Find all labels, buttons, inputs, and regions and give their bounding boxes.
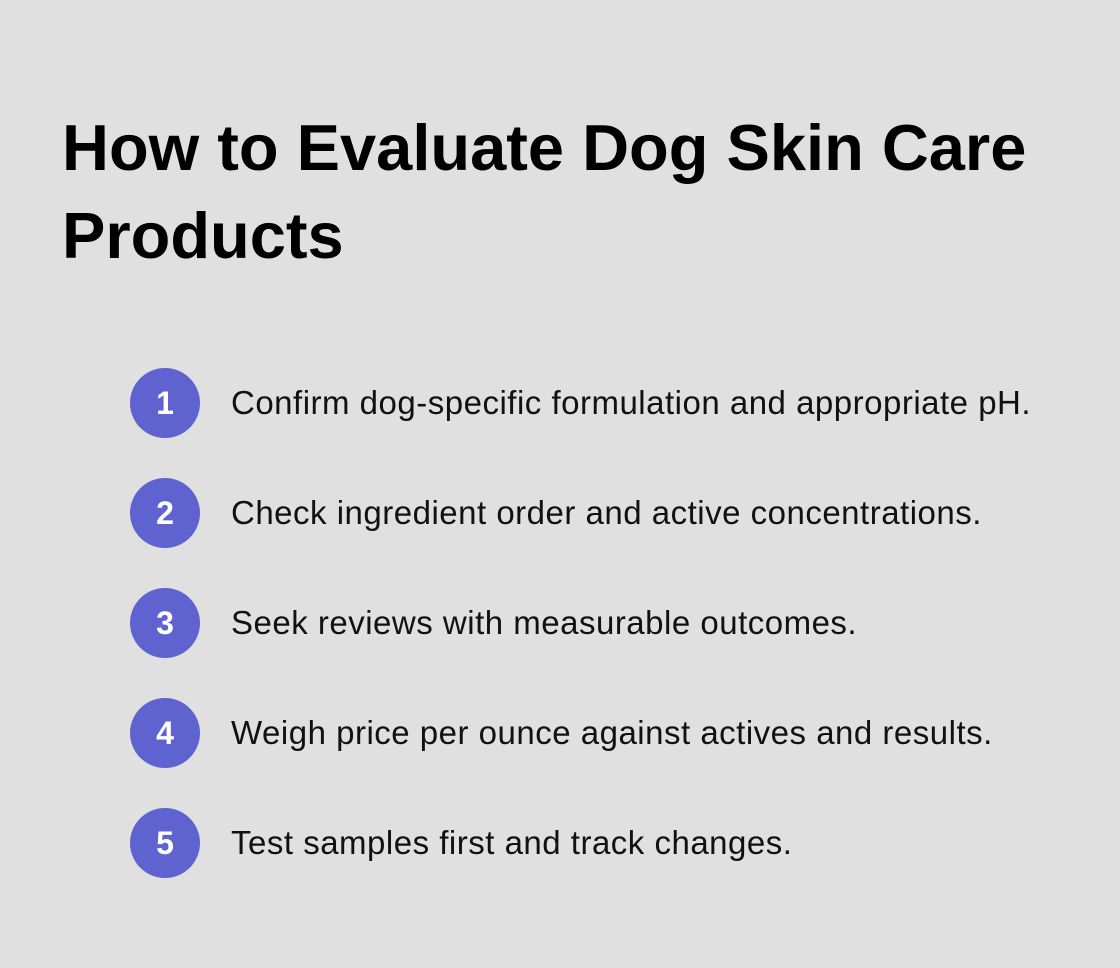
step 3 [130,588,857,658]
step 2: 2 [156,495,174,531]
step 3: Seek reviews with measurable outcomes. [231,604,857,641]
step 1: 1 [156,385,174,421]
title: Products [62,199,344,272]
step 4 [130,698,993,768]
step 3: 3 [156,605,174,641]
step 5: Test samples first and track changes. [231,824,792,861]
title: How to Evaluate Dog Skin Care [62,111,1026,184]
step 4: Weigh price per ounce against actives and results. [231,714,993,751]
step 2 [130,478,982,548]
step 2: Check ingredient order and active concentrations. [231,494,982,531]
step 1 [130,368,1031,438]
title [62,111,1026,272]
step 5: 5 [156,825,174,861]
step 1: Confirm dog-specific formulation and appropriate pH. [231,384,1031,421]
step 4: 4 [156,715,174,751]
step 5 [130,808,792,878]
